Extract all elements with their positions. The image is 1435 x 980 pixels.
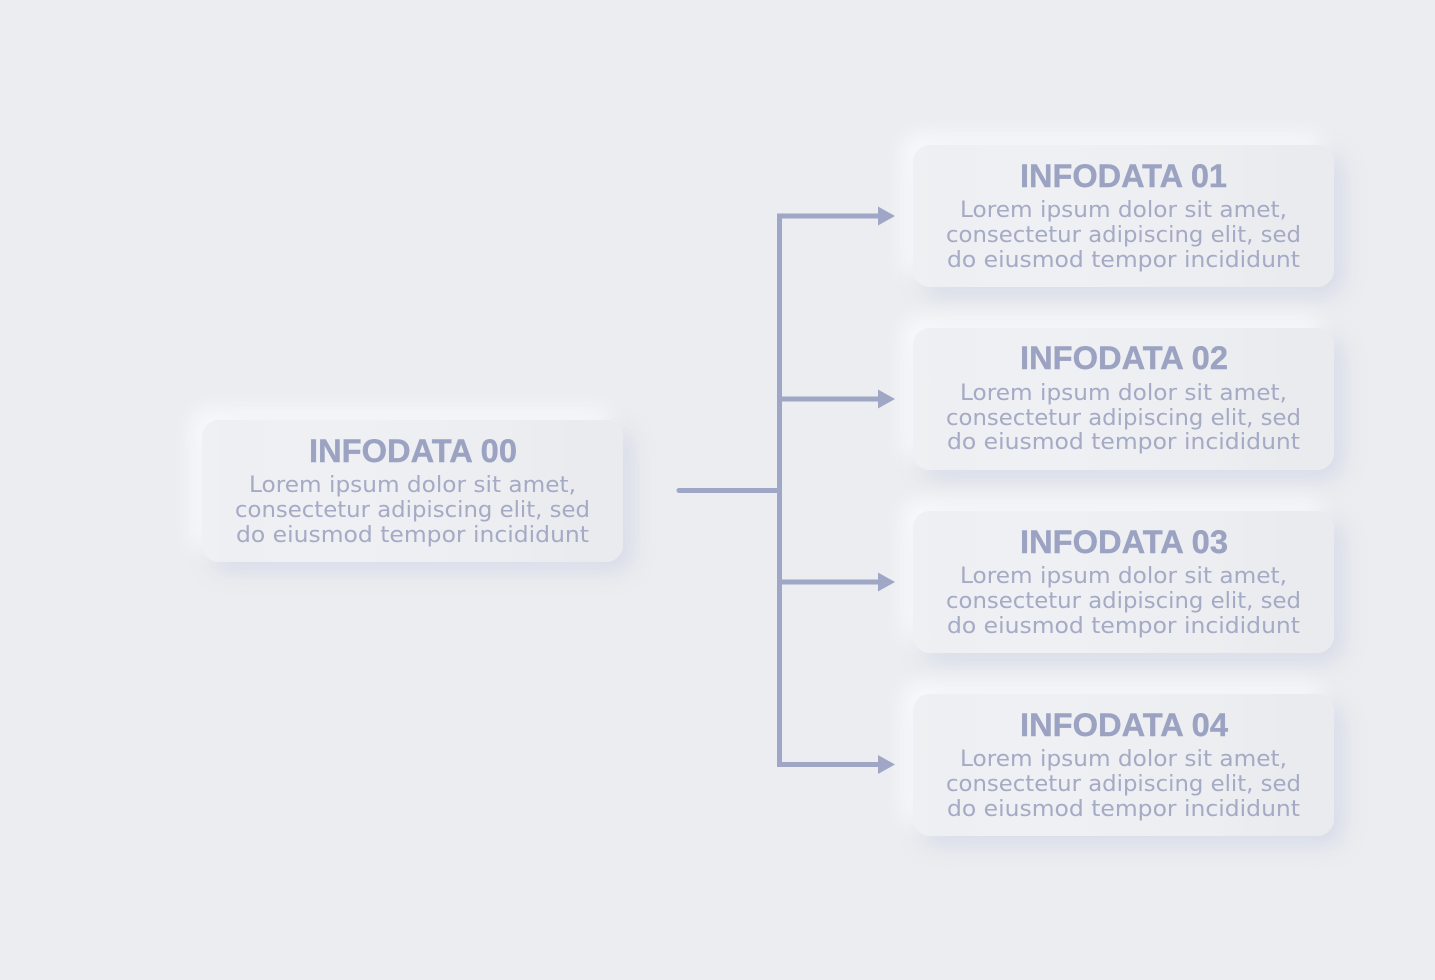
- text block: description: [946, 563, 1301, 639]
- panel: card Infodata 04: [913, 694, 1334, 836]
- heading: Infodata 03: INFODATA 03: [1020, 524, 1228, 560]
- connector: vertical trunk: [777, 214, 782, 767]
- text block: description: [946, 380, 1301, 455]
- text block: description: [946, 746, 1301, 822]
- text block: description: consectetur adipiscing elit, sed: [946, 222, 1301, 248]
- text block: description: do eiusmod tempor incididunt: [947, 429, 1300, 455]
- arrow: source line to trunk: [679, 488, 780, 493]
- text block: description: do eiusmod tempor incididunt: [947, 613, 1300, 639]
- text block: description: [946, 197, 1301, 273]
- text block: description: Lorem ipsum dolor sit amet,: [960, 197, 1287, 223]
- text block: description: consectetur adipiscing elit, sed: [235, 497, 590, 523]
- heading: Infodata 00: INFODATA 00: [309, 433, 517, 469]
- text block: description: do eiusmod tempor incididunt: [947, 796, 1300, 822]
- arrow: to Infodata 04: [779, 755, 895, 774]
- panel: source card Infodata 00: [202, 420, 623, 562]
- panel: card Infodata 01: [913, 145, 1334, 287]
- heading: Infodata 02: INFODATA 02: [1020, 340, 1228, 376]
- text block: description: consectetur adipiscing elit, sed: [946, 771, 1301, 797]
- arrow: to Infodata 02: [779, 390, 895, 408]
- heading: Infodata 01: INFODATA 01: [1020, 158, 1227, 194]
- text block: description: Lorem ipsum dolor sit amet,: [960, 746, 1287, 772]
- text block: description: Lorem ipsum dolor sit amet,: [249, 472, 576, 498]
- arrow: to Infodata 01: [779, 206, 895, 226]
- text block: description: [235, 472, 590, 548]
- arrow: to Infodata 03: [779, 572, 895, 592]
- text block: description: consectetur adipiscing elit, sed: [946, 588, 1301, 614]
- text block: description: Lorem ipsum dolor sit amet,: [960, 380, 1287, 406]
- text block: description: Lorem ipsum dolor sit amet,: [960, 563, 1287, 589]
- text block: description: consectetur adipiscing elit, sed: [946, 405, 1301, 431]
- panel: card Infodata 03: [913, 511, 1334, 653]
- text block: description: do eiusmod tempor incididunt: [947, 247, 1300, 273]
- panel: card Infodata 02: [913, 328, 1334, 470]
- text block: description: do eiusmod tempor incididunt: [236, 522, 589, 548]
- heading: Infodata 04: INFODATA 04: [1020, 707, 1228, 743]
